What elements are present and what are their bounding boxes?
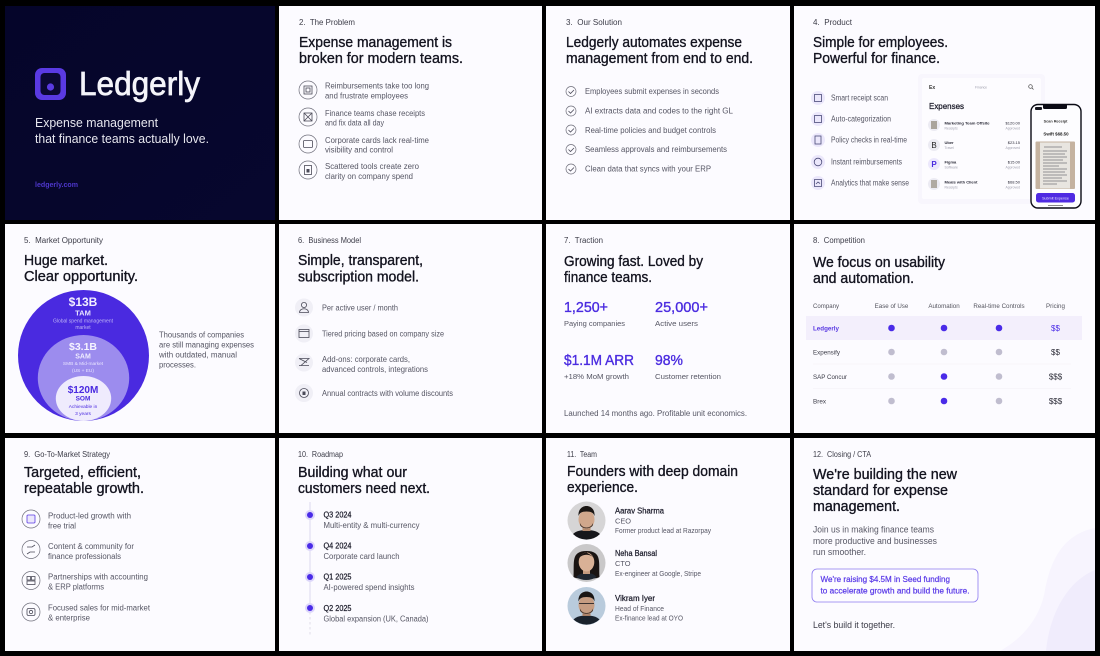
checklist: Clean data that syncs with your ERP xyxy=(585,164,711,174)
closing text: run smoother. xyxy=(813,547,866,557)
pricing item: annual contracts: Annual contracts with volume discounts xyxy=(322,389,453,398)
pricing item: per user: Per active user / month xyxy=(322,304,398,312)
strategy item: content: Content & community for xyxy=(48,542,134,551)
expenses dashboard mockup: Meals with Client xyxy=(944,180,978,184)
SAM circle: (US + EU) xyxy=(72,368,94,374)
pricing item: tiers: Tiered pricing based on company size xyxy=(322,330,444,338)
SOM circle: $120M xyxy=(68,385,98,396)
heading: Building what our xyxy=(298,465,407,481)
checklist: Employees submit expenses in seconds xyxy=(585,87,719,96)
row: Expensify: $$ xyxy=(1051,348,1060,357)
feature list: Instant reimbursements xyxy=(831,158,902,166)
comparison table: Automation xyxy=(928,303,960,310)
milestone: Q3 2024 xyxy=(305,510,420,530)
TAM circle: Global spend management xyxy=(53,318,114,324)
heading: Expense management is xyxy=(299,35,452,51)
heading: Simple for employees. xyxy=(813,35,948,51)
heading: management. xyxy=(813,499,900,515)
founder: Neha Bansal xyxy=(568,544,701,582)
heading: repeatable growth. xyxy=(24,481,144,497)
SOM circle: 3 years xyxy=(75,411,91,417)
panel: the problem xyxy=(279,6,542,220)
pricing item: add-ons: advanced controls, integrations xyxy=(322,365,428,374)
decorative wave shapes xyxy=(1000,528,1095,651)
section label: 11. Team xyxy=(567,450,597,459)
row: Brex: Brex xyxy=(813,398,827,406)
problem item: reimbursements xyxy=(299,81,429,100)
wordmark: Ledgerly xyxy=(79,65,200,102)
problem item: reimbursements: Reimbursements take too long xyxy=(325,82,429,90)
expenses dashboard mockup: Ex xyxy=(929,85,935,91)
heading: subscription model. xyxy=(298,270,419,286)
milestone: Q2 2025 xyxy=(305,603,429,624)
row: SAP Concur: SAP Concur xyxy=(813,374,848,381)
heading: experience. xyxy=(567,480,638,496)
pricing item: tiers xyxy=(295,324,444,342)
row: Expensify: Expensify xyxy=(813,350,841,356)
problem item: receipts: Finance teams chase receipts xyxy=(325,109,425,118)
comparison table: Ease of Use xyxy=(875,303,909,310)
closing text: more productive and businesses xyxy=(813,536,938,546)
phone mockup: scan receipt: Submit Expense xyxy=(1042,196,1069,200)
expenses dashboard mockup: Expenses xyxy=(929,102,964,111)
funding callout xyxy=(812,569,978,602)
section label: 2. The Problem xyxy=(299,18,355,27)
heading: We focus on usability xyxy=(813,255,946,271)
strategy item: partnerships: Partnerships with accounting xyxy=(48,572,148,582)
SAM circle xyxy=(38,335,129,421)
feature list: Smart receipt scan xyxy=(831,94,888,102)
SOM circle xyxy=(56,376,111,421)
heading: standard for expense xyxy=(813,483,948,499)
founder: Vikram Iyer: Head of Finance xyxy=(615,604,664,613)
section label: 6. Business Model xyxy=(298,236,361,245)
heading: broken for modern teams. xyxy=(299,51,463,67)
founder: Aarav Sharma: CEO xyxy=(615,516,631,526)
funding callout: We're raising $4.5M in Seed funding xyxy=(820,574,950,584)
SAM circle: SMB & Mid-market xyxy=(63,361,104,367)
tagline: Expense management xyxy=(35,115,158,130)
expenses dashboard mockup: $120.00 xyxy=(1006,120,1021,126)
comparison table: Real-time Controls xyxy=(973,303,1025,310)
milestone: Q4 2024: Q4 2024 xyxy=(324,542,352,550)
panel: traction xyxy=(546,224,790,433)
row: Brex: $$$ xyxy=(1049,397,1063,406)
problem item: scattered tools: Scattered tools create zero xyxy=(325,162,420,171)
pricing item: per user xyxy=(295,298,398,316)
expenses dashboard mockup: Finance xyxy=(975,86,987,90)
milestone: Q1 2025: AI-powered spend insights xyxy=(324,583,414,592)
strategy item: content: finance professionals xyxy=(48,552,121,561)
SAM circle: SAM xyxy=(75,354,91,360)
stat: ARR: +18% MoM growth xyxy=(564,372,629,381)
heading: Simple, transparent, xyxy=(298,253,423,269)
expenses dashboard mockup: Figma xyxy=(944,160,957,164)
heading xyxy=(298,253,423,286)
pricing item: add-ons: Add-ons: corporate cards, xyxy=(322,355,410,364)
section label: 5. Market Opportunity xyxy=(24,236,103,245)
heading: Clear opportunity. xyxy=(24,269,138,285)
expenses dashboard mockup: Software xyxy=(944,166,958,170)
nested market circles chart xyxy=(18,290,149,421)
row: Brex xyxy=(813,397,1063,406)
expenses dashboard mockup: Approved xyxy=(1005,146,1020,150)
problem item: corporate cards: Corporate cards lack real-time xyxy=(325,136,430,145)
heading xyxy=(813,35,948,67)
row: Expensify xyxy=(813,348,1060,357)
TAM circle xyxy=(18,290,149,421)
heading: Growing fast. Loved by xyxy=(564,254,704,270)
problem item: reimbursements: and frustrate employees xyxy=(325,92,408,100)
heading xyxy=(567,464,738,496)
feature list: Analytics that make sense xyxy=(831,178,909,188)
panel: closing call to action xyxy=(794,438,1095,651)
comparison table xyxy=(806,303,1082,406)
heading: Founders with deep domain xyxy=(567,464,738,480)
stat: retention: 98% xyxy=(655,353,683,369)
founder: Neha Bansal: Neha Bansal xyxy=(615,549,657,558)
icon: Ledgerly logo xyxy=(35,68,66,100)
heading: and automation. xyxy=(813,271,914,287)
heading: Ledgerly automates expense xyxy=(566,35,742,51)
expenses dashboard mockup: Receipts xyxy=(944,126,958,130)
market note: are still managing expenses xyxy=(159,340,254,350)
panel: competition xyxy=(794,224,1095,433)
strategy item: sales: Focused sales for mid-market xyxy=(48,604,151,612)
expenses dashboard mockup: Marketing Team Offsite xyxy=(944,120,990,126)
row: Ledgerly: Ledgerly xyxy=(813,326,839,332)
heading xyxy=(566,35,753,67)
panel: market opportunity xyxy=(5,224,275,433)
stat: paying companies: 1,250+ xyxy=(564,300,608,316)
strategy item: content xyxy=(22,540,134,561)
tagline: that finance teams actually love. xyxy=(35,131,209,146)
panel: team xyxy=(546,438,790,651)
stat: active users: 25,000+ xyxy=(655,300,708,316)
sign-off: Let's build it together. xyxy=(813,620,895,630)
founder: Neha Bansal: CTO xyxy=(615,559,631,568)
pricing item: annual contracts xyxy=(295,384,453,402)
problem item: corporate cards: visibility and control xyxy=(325,146,393,154)
heading: Powerful for finance. xyxy=(813,51,940,67)
strategy item: partnerships: & ERP platforms xyxy=(48,582,104,592)
expenses dashboard mockup: Travel xyxy=(944,146,954,150)
milestone: Q4 2024 xyxy=(305,541,400,561)
expenses dashboard mockup: $23.15 xyxy=(1008,140,1021,145)
feature list: Policy checks in real-time xyxy=(831,136,907,144)
heading xyxy=(813,255,946,287)
strategy item: sales: & enterprise xyxy=(48,614,91,622)
expenses dashboard mockup: Receipts xyxy=(944,186,958,190)
stat: active users xyxy=(655,300,708,328)
comparison table: Company xyxy=(813,303,840,310)
expenses dashboard mockup: Approved xyxy=(1005,166,1020,170)
closing text xyxy=(813,524,938,557)
founder: Aarav Sharma: Former product lead at Razorpay xyxy=(615,526,711,535)
heading: We're building the new xyxy=(813,467,957,483)
heading: customers need next. xyxy=(298,481,430,497)
founder: Neha Bansal: Ex-engineer at Google, Stripe xyxy=(615,569,701,578)
row: SAP Concur: $$$ xyxy=(1049,372,1063,382)
checklist xyxy=(566,86,734,174)
problem item: receipts xyxy=(299,108,425,128)
funding callout: to accelerate growth and build the future. xyxy=(820,586,970,596)
section label: 4. Product xyxy=(813,18,853,27)
heading xyxy=(564,254,704,286)
stat: paying companies xyxy=(564,300,625,328)
strategy item: product-led xyxy=(22,510,131,530)
expenses dashboard mockup xyxy=(918,74,1045,204)
row: Ledgerly xyxy=(813,324,1060,333)
panel: our solution xyxy=(546,6,790,220)
problem item: scattered tools: clarity on company spend xyxy=(325,172,413,181)
tagline xyxy=(35,115,209,146)
heading xyxy=(813,467,957,515)
panel: cover xyxy=(5,6,275,220)
problem item: receipts: and fix data all day xyxy=(325,118,384,128)
TAM circle: TAM xyxy=(75,308,91,318)
milestone: Q2 2025: Global expansion (UK, Canada) xyxy=(324,614,429,624)
feature list xyxy=(811,91,909,190)
stat: retention: Customer retention xyxy=(655,372,721,381)
stat: ARR: $1.1M ARR xyxy=(564,353,634,369)
heading xyxy=(24,465,144,497)
heading xyxy=(24,253,138,285)
comparison table: Pricing xyxy=(1046,303,1066,310)
market note: processes. xyxy=(159,360,196,370)
founder: Aarav Sharma: Aarav Sharma xyxy=(615,506,665,516)
stat: retention xyxy=(655,353,721,381)
closing text: Join us in making finance teams xyxy=(813,524,935,534)
expenses dashboard mockup: $68.50 xyxy=(1008,180,1021,184)
market note xyxy=(158,330,254,370)
stat: paying companies: Paying companies xyxy=(564,319,625,328)
SOM circle: Achievable in xyxy=(69,404,98,410)
milestone: Q1 2025 xyxy=(305,572,414,592)
section label: 9. Go-To-Market Strategy xyxy=(24,450,110,459)
SAM circle: $3.1B xyxy=(69,341,97,353)
phone mockup: scan receipt xyxy=(1031,104,1081,208)
feature list: Auto-categorization xyxy=(831,114,891,124)
heading: Targeted, efficient, xyxy=(24,465,141,481)
expenses dashboard mockup: B xyxy=(931,141,937,150)
stat: ARR xyxy=(564,353,634,381)
TAM circle: $13B xyxy=(69,295,98,309)
heading xyxy=(298,465,430,497)
strategy item: product-led: free trial xyxy=(48,522,76,530)
checklist: Real-time policies and budget controls xyxy=(585,126,716,135)
expenses dashboard mockup: Uber xyxy=(944,140,954,145)
row: Ledgerly: $$ xyxy=(1051,324,1060,333)
founder: Aarav Sharma xyxy=(568,502,711,540)
checklist: Seamless approvals and reimbursements xyxy=(585,145,727,154)
panel: go-to-market strategy xyxy=(5,438,275,651)
section label: 7. Traction xyxy=(564,236,603,245)
expenses dashboard mockup: Approved xyxy=(1005,126,1020,130)
founder: Vikram Iyer: Ex-finance lead at OYO xyxy=(615,614,683,622)
heading: management from end to end. xyxy=(566,51,753,67)
expenses dashboard mockup: P xyxy=(931,160,937,169)
strategy item: partnerships xyxy=(22,572,148,592)
milestone: Q3 2024: Multi-entity & multi-currency xyxy=(324,521,420,530)
heading: Huge market. xyxy=(24,253,108,269)
strategy item: product-led: Product-led growth with xyxy=(48,512,131,520)
panel: business model xyxy=(279,224,542,433)
milestone: Q2 2025: Q2 2025 xyxy=(324,604,352,613)
expenses dashboard mockup: Approved xyxy=(1005,186,1020,190)
panel: roadmap xyxy=(279,438,542,651)
heading: finance teams. xyxy=(564,270,652,286)
checklist: AI extracts data and codes to the right GL xyxy=(585,106,734,116)
milestone: Q3 2024: Q3 2024 xyxy=(324,510,352,520)
phone mockup: scan receipt: Swift $68.50 xyxy=(1043,132,1069,136)
section label: 8. Competition xyxy=(813,236,865,245)
expenses dashboard mockup: $15.00 xyxy=(1008,160,1021,164)
website link: ledgerly.com xyxy=(35,180,78,189)
heading xyxy=(299,35,463,67)
problem item: corporate cards xyxy=(299,135,430,154)
section label: 3. Our Solution xyxy=(566,18,622,27)
section label: 10. Roadmap xyxy=(298,450,344,459)
row: SAP Concur xyxy=(813,372,1063,382)
pricing item: add-ons xyxy=(295,354,428,374)
SOM circle: SOM xyxy=(76,396,90,402)
TAM circle: market xyxy=(75,325,91,331)
milestone: Q4 2024: Corporate card launch xyxy=(324,552,400,561)
market note: Thousands of companies xyxy=(159,330,244,340)
section label: 12. Closing / CTA xyxy=(813,450,872,459)
market note: with outdated, manual xyxy=(158,350,237,360)
milestone: Q1 2025: Q1 2025 xyxy=(324,572,352,582)
stat: active users: Active users xyxy=(655,319,698,328)
panel: product xyxy=(794,6,1095,220)
problem item: scattered tools xyxy=(299,161,420,181)
founder: Vikram Iyer: Vikram Iyer xyxy=(615,594,655,603)
founder: Vikram Iyer xyxy=(568,587,683,625)
phone mockup: scan receipt: Scan Receipt xyxy=(1044,120,1068,124)
timeline xyxy=(305,502,429,637)
strategy item: sales xyxy=(22,603,151,622)
traction note: Launched 14 months ago. Profitable unit economics. xyxy=(564,409,747,418)
